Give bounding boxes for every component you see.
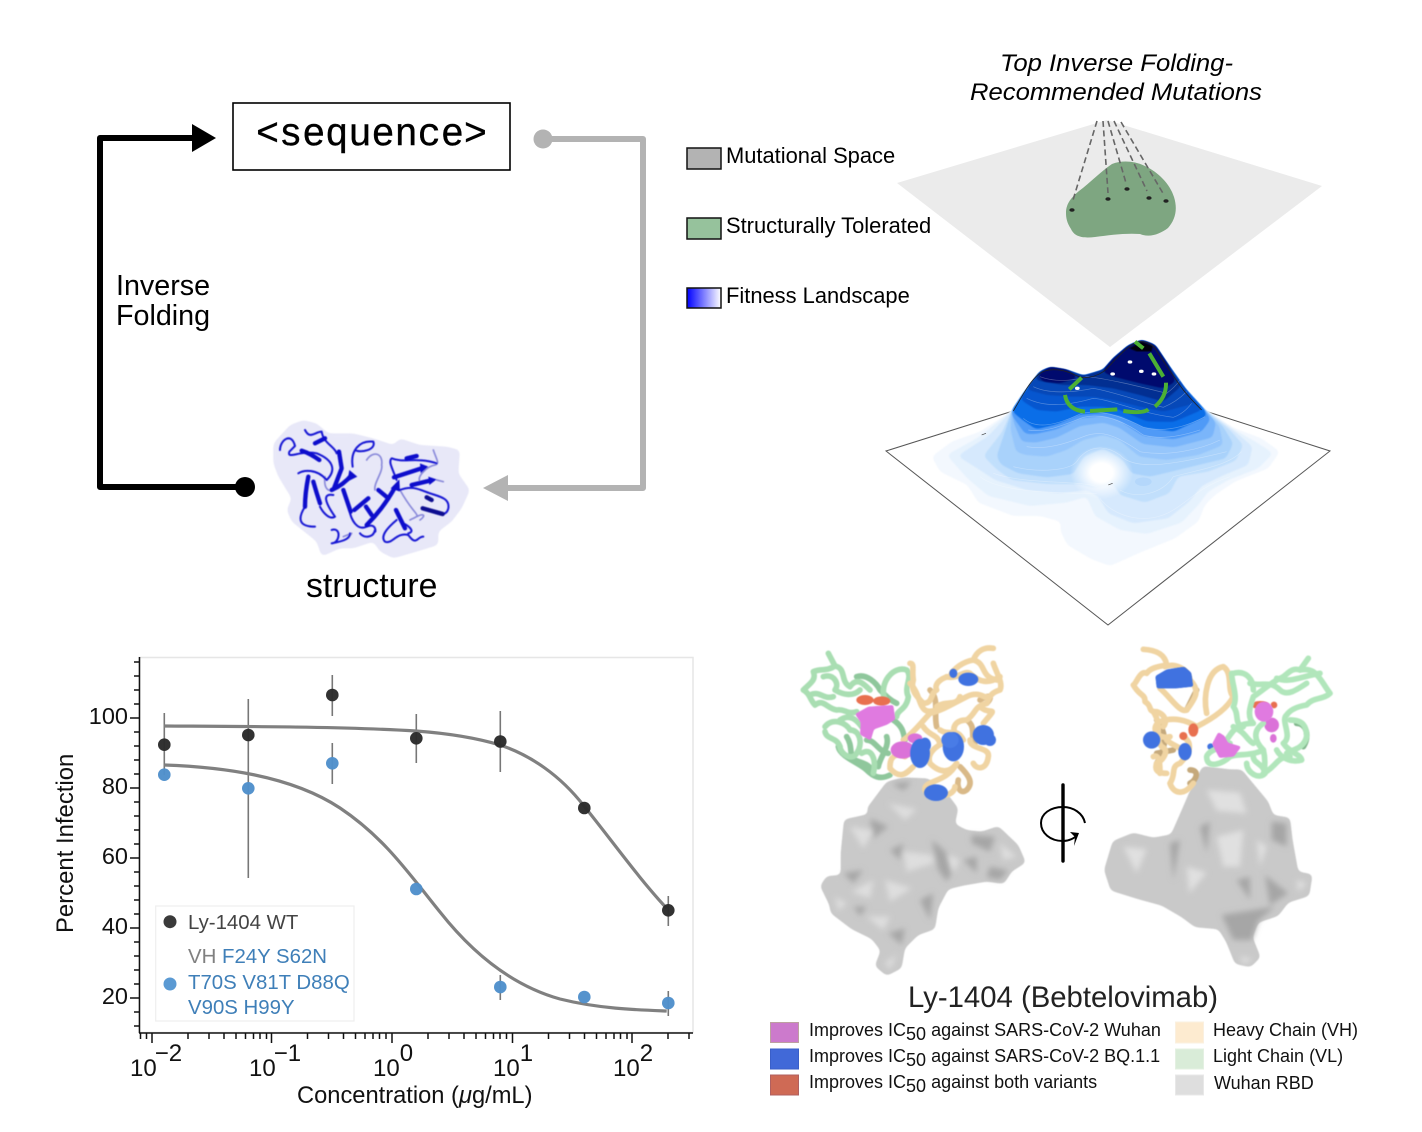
fitness landscape surface: [932, 340, 1280, 566]
legend: antibody residues and chains: against SARS-CoV-2 BQ.1.1: [926, 1046, 1160, 1066]
x tick labels: 10: [493, 1055, 520, 1082]
back mutation residues: [1143, 667, 1279, 760]
x tick labels: [130, 1040, 653, 1082]
dashed outline: structurally tolerated region on landscape: [1065, 342, 1166, 412]
label: Inverse Folding: Folding: [116, 300, 210, 332]
fitness landscape frame: [886, 410, 1330, 625]
legend: landscape: Fitness Landscape: [726, 283, 910, 308]
legend: antibody residues and chains: [770, 1020, 1358, 1096]
sequence box: [233, 103, 510, 170]
legend: antibody residues and chains: Improves IC: [809, 1046, 906, 1066]
icon: protein structure ribbon: [273, 420, 470, 558]
x tick labels: 10: [613, 1055, 640, 1082]
legend: landscape: Mutational Space: [726, 143, 895, 168]
arrow: inverse folding (black): [100, 124, 255, 497]
x tick labels: −2: [155, 1040, 182, 1067]
antibody-RBD complex: rotated view: [1104, 649, 1330, 967]
legend: antibody residues and chains: Improves IC: [809, 1072, 906, 1092]
legend: antibody residues and chains: Light Chain (VL): [1213, 1046, 1343, 1066]
title: Top Inverse Folding-Recommended Mutations: Recommended Mutations: [970, 79, 1262, 106]
legend: landscape: [687, 143, 931, 308]
structurally tolerated region: [1066, 162, 1176, 237]
title: Top Inverse Folding-Recommended Mutations: [970, 50, 1262, 106]
x tick labels: 1: [520, 1040, 533, 1067]
legend: antibody residues and chains: Improves IC: [809, 1020, 906, 1040]
legend: antibody residues and chains: against SARS-CoV-2 Wuhan: [926, 1020, 1161, 1040]
light chain ribbon: [1207, 658, 1330, 776]
label: structure: structure: [306, 567, 437, 605]
icon: rotation: [1041, 785, 1085, 861]
error bars: [164, 675, 668, 1016]
legend: antibody residues and chains: 50: [906, 1076, 926, 1096]
RBD surface: [1104, 766, 1313, 967]
legend: antibody residues and chains: against both variants: [926, 1072, 1097, 1092]
y tick labels: 20: [102, 983, 128, 1009]
recommended mutation leader lines and points: [1069, 121, 1169, 212]
light chain ribbon: [803, 653, 909, 777]
legend: landscape: Structurally Tolerated: [726, 213, 931, 238]
y tick labels: 100: [89, 703, 128, 729]
y tick labels: 80: [102, 773, 128, 799]
sequence box: <sequence>: [256, 113, 487, 157]
heavy chain ribbon: [890, 648, 1001, 796]
front mutation residues: [1212, 702, 1273, 758]
chart legend: [156, 906, 354, 1021]
x tick labels: 10: [130, 1055, 157, 1082]
data points: mutant: [158, 757, 675, 1009]
title: Ly-1404 (Bebtelovimab): Ly-1404 (Bebtelovimab): [908, 981, 1218, 1014]
y tick labels: [89, 703, 128, 1009]
chart legend: T70S V81T D88Q: [188, 972, 350, 994]
chart legend: VH F24Y S62N: [188, 946, 327, 968]
white mutation points on landscape: [1075, 360, 1156, 390]
legend: antibody residues and chains: 50: [906, 1050, 926, 1070]
antibody-RBD complex: front view: [803, 648, 1026, 976]
legend: antibody residues and chains: 50: [906, 1024, 926, 1044]
fit curve: Ly-1404 WT: [164, 726, 667, 908]
label: Inverse Folding: Inverse: [116, 270, 210, 302]
mutation residues: [855, 669, 996, 801]
RBD surface: [820, 777, 1026, 976]
x tick labels: 2: [640, 1040, 653, 1067]
axis title: Concentration: Concentration (μg/mL): [297, 1083, 532, 1109]
chart legend: V90S H99Y: [188, 997, 295, 1019]
label: Inverse Folding: [116, 270, 210, 332]
x axis with ticks: [139, 1033, 693, 1043]
heavy chain ribbon: [1133, 649, 1233, 792]
title: Top Inverse Folding-Recommended Mutations: Top Inverse Folding-: [1000, 50, 1233, 77]
chart legend: Ly-1404 WT: [188, 912, 298, 934]
legend: antibody residues and chains: Wuhan RBD: [1214, 1073, 1314, 1093]
y tick labels: 60: [102, 843, 128, 869]
mutational space plane: [897, 120, 1322, 347]
arrowheads on beta strands: [347, 463, 437, 492]
x tick labels: 0: [400, 1040, 413, 1067]
legend: antibody residues and chains: Heavy Chain (VH): [1213, 1020, 1358, 1040]
arrow: structure prediction (gray): [483, 130, 643, 501]
x tick labels: 10: [249, 1055, 276, 1082]
fit curve: mutant: [164, 765, 667, 1011]
axis title: Percent Infection: Percent Infection: [52, 754, 79, 933]
y tick labels: 40: [102, 913, 128, 939]
chart: percent infection vs concentration: [52, 657, 693, 1109]
y axis with ticks: [130, 657, 140, 1033]
x tick labels: 10: [373, 1055, 400, 1082]
x tick labels: −1: [274, 1040, 301, 1067]
data points: Ly-1404 WT: [158, 689, 675, 917]
